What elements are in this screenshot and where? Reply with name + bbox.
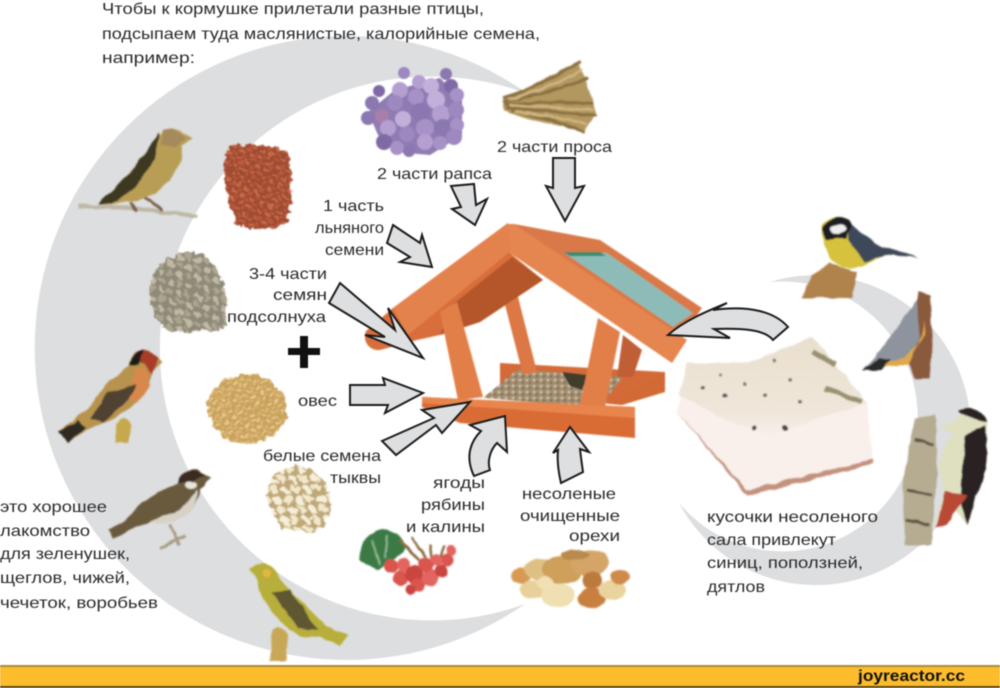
seeds: nuts — [511, 550, 630, 608]
seed labels: семян — [273, 287, 327, 304]
seed labels: подсолнуха — [227, 309, 326, 326]
arrow: nuts — [553, 427, 589, 483]
arrow: lard — [668, 303, 788, 340]
small grey crescent — [679, 275, 971, 585]
arrow: berries — [469, 416, 507, 476]
left caption: чечеток, воробьев — [0, 595, 158, 612]
bird: nuthatch — [862, 292, 933, 380]
left caption: лакомство — [0, 523, 90, 540]
arrow: millet — [546, 158, 584, 221]
feeder: front base — [610, 372, 665, 405]
bird: greenfinch — [78, 128, 197, 216]
intro text: Чтобы к кормушке прилетали разные птицы, — [102, 1, 484, 18]
bird: woodpecker — [903, 408, 987, 545]
lard caption: дятлов — [707, 579, 765, 596]
seeds: sunflower — [150, 253, 227, 332]
arrow: pumpkin — [382, 402, 470, 455]
seed labels: семени — [325, 242, 384, 259]
bird: great tit — [801, 217, 918, 298]
lard caption: сала привлекут — [707, 532, 837, 549]
bird: goldfinch — [58, 349, 162, 443]
seed labels: очищенные — [520, 508, 620, 525]
lard caption: кусочки несоленого — [707, 509, 878, 526]
lard caption: синиц, поползней, — [707, 555, 863, 572]
lard caption — [707, 509, 878, 596]
seed labels: льняного — [315, 220, 384, 237]
feeder: back posts — [503, 293, 537, 375]
arrow: rapeseed — [451, 184, 487, 225]
seed labels: 3-4 части — [249, 266, 327, 283]
lard — [677, 337, 873, 496]
feeder: back tray — [500, 363, 665, 404]
seed labels: белые семена — [263, 448, 381, 465]
footer bar — [0, 665, 1000, 688]
seeds: rowan berries — [359, 529, 457, 595]
arrow: oats — [350, 378, 423, 413]
plus sign — [288, 336, 320, 368]
intro text: например: — [102, 50, 195, 67]
intro text: подсыпаем туда маслянистые, калорийные семена, — [102, 26, 540, 43]
seeds: pumpkin — [267, 466, 331, 533]
left caption: для зеленушек, — [0, 546, 130, 563]
bird: sparrow — [108, 470, 210, 548]
seeds: millet — [503, 62, 596, 132]
seed labels: тыквы — [330, 470, 381, 487]
left caption: щеглов, чижей, — [0, 570, 130, 587]
seed labels: 2 части рапса — [377, 166, 492, 183]
seeds: rapeseed — [361, 67, 464, 157]
footer watermark: joyreactor.cc — [857, 668, 965, 685]
arrow: flax — [387, 225, 432, 267]
seed labels: рябины — [421, 497, 485, 514]
seed labels: 2 части проса — [497, 139, 612, 156]
left caption: это хорошее — [0, 499, 107, 516]
seed labels: овес — [298, 393, 337, 410]
seed labels: несоленые — [522, 486, 616, 503]
seed labels — [227, 139, 620, 545]
seed labels: ягоды — [433, 475, 485, 492]
seed labels: 1 часть — [323, 198, 384, 215]
feeder: seeds on tray — [483, 370, 623, 406]
bird: yellow siskin — [249, 564, 349, 661]
feeder: front posts — [440, 302, 483, 400]
seed labels: орехи — [569, 528, 620, 545]
large grey crescent — [35, 36, 528, 660]
seeds: flax — [224, 144, 292, 230]
feeder — [365, 223, 702, 438]
feeder: right roof wood and teal strip — [514, 224, 702, 330]
feeder: right roof plank — [508, 224, 687, 363]
seeds: oats — [207, 375, 287, 444]
feeder: left roof — [365, 223, 543, 350]
arrow: sunflower — [329, 283, 423, 358]
intro text — [102, 1, 540, 67]
seed labels: и калины — [406, 519, 485, 536]
left caption — [0, 499, 158, 612]
